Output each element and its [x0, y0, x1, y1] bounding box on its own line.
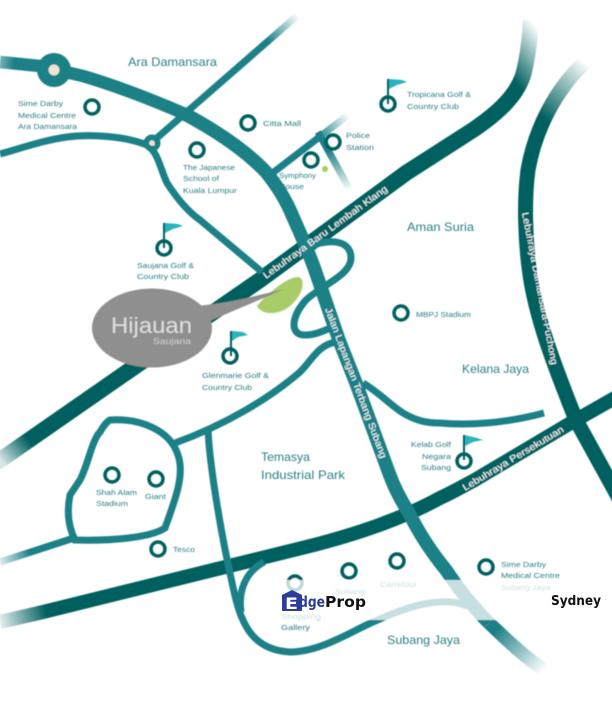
landmark: Tesco — [151, 542, 195, 556]
landmark: Sime Darby Medical Centre Subang Jaya: Medical Centre — [501, 571, 560, 580]
road name: Lebuhraya Baru Lembah Klang: Lebuhraya Baru Lembah Klang — [261, 184, 390, 281]
road: Glenmarie link and vertical road — [175, 342, 467, 652]
landmark: Saujana Golf and Country Club: Saujana Golf & — [137, 261, 194, 270]
logo: EdgeProp: dge — [299, 593, 325, 611]
landmark: Sime Darby Medical Centre Ara Damansara: Sime Darby — [18, 99, 63, 108]
landmark: Symphony House: House — [279, 182, 304, 191]
landmark: The Japanese School of Kuala Lumpur: School of — [183, 174, 220, 183]
area label: Subang Jaya: Subang Jaya — [387, 633, 460, 647]
road: Lebuhraya Damansara-Puchong — [526, 62, 612, 500]
landmark: The Japanese School of Kuala Lumpur — [183, 143, 238, 195]
area label: Ara Damansara: Ara Damansara — [128, 55, 217, 69]
area label: Kelana Jaya: Kelana Jaya — [462, 362, 529, 376]
road: Kelana Jaya link — [363, 383, 544, 424]
road: western link with small roundabout — [0, 136, 262, 272]
landmark: Subang — [335, 564, 365, 596]
roundabout — [37, 53, 71, 87]
road: interchange loop — [294, 242, 351, 335]
landmark: Kelab Golf Negara Subang: Negara — [422, 452, 452, 461]
landmark: Shopping Gallery: Shopping — [281, 612, 321, 621]
landmark: MBPJ Stadium: MBPJ Stadium — [416, 310, 471, 319]
landmark: Police Station: Police — [346, 131, 370, 140]
logo: EdgeProp: Prop — [325, 593, 366, 611]
label: Sydney: Sydney — [551, 594, 601, 609]
translucent watermark band — [280, 580, 612, 620]
landmark: Carrefour: Carrefour — [380, 580, 418, 589]
landmark: Kelab Golf Negara Subang: Kelab Golf — [411, 440, 452, 449]
landmark: Carrefour — [380, 554, 418, 589]
logo: EdgeProp — [282, 590, 366, 613]
landmark: Glenmarie Golf and Country Club — [202, 331, 269, 392]
landmark: Shopping Gallery: Gallery — [281, 623, 310, 632]
road name: Jalan Lapangan Terbang Subang: Jalan Lapangan Terbang Subang — [322, 306, 389, 460]
landmark: Glenmarie Golf and Country Club: Glenmarie Golf & — [202, 371, 269, 380]
site plot — [257, 277, 303, 313]
landmark: Shah Alam Stadium: Shah Alam — [96, 488, 137, 497]
landmark: Sime Darby Medical Centre Ara Damansara: Medical Centre — [18, 111, 76, 120]
road name: Lebuhraya Persekutuan: Lebuhraya Persekutuan — [461, 424, 566, 494]
landmark: MBPJ Stadium — [394, 306, 471, 320]
callout: Hijauan Saujana: Saujana — [153, 337, 192, 346]
landmark: Subang: Subang — [335, 587, 365, 596]
road name: Lebuhraya Damansara-Puchong: Lebuhraya Damansara-Puchong — [519, 211, 559, 366]
landmark: Sime Darby Medical Centre Subang Jaya: Sime Darby — [501, 560, 546, 569]
landmark: Giant: Giant — [145, 492, 167, 501]
small roundabout centre — [149, 140, 155, 146]
road: Lebuhraya Persekutuan — [0, 395, 612, 622]
road: Shah Alam loop — [68, 420, 180, 540]
road: Ara Damansara highway and Jalan Lapangan Terbang Subang — [0, 62, 544, 670]
callout: Hijauan Saujana — [92, 288, 284, 368]
landmark: Saujana Golf and Country Club — [137, 223, 194, 281]
landmark: Tesco: Tesco — [173, 545, 195, 554]
area label: Temasya Industrial Park — [261, 450, 346, 482]
landmark: Glenmarie Golf and Country Club: Country Club — [202, 383, 252, 392]
landmark: Shopping Gallery — [281, 576, 321, 632]
landmark: Saujana Golf and Country Club: Country Club — [137, 272, 189, 281]
area label: Aman Suria: Aman Suria — [407, 220, 474, 234]
landmark: Symphony House: Symphony — [279, 171, 316, 180]
landmark: Shah Alam Stadium — [96, 468, 137, 508]
landmark: Tropicana Golf and Country Club: Tropicana Golf & — [407, 90, 471, 99]
landmark: Tropicana Golf and Country Club — [381, 79, 471, 111]
landmark: Tropicana Golf and Country Club: Country Club — [407, 102, 459, 111]
area label: Temasya Industrial Park: Temasya — [261, 450, 310, 464]
landmark: Kelab Golf Negara Subang — [411, 435, 483, 472]
landmark: Citta Mall — [241, 116, 301, 130]
landmark: Symphony House — [279, 153, 328, 191]
callout: Hijauan Saujana: Hijauan — [111, 313, 192, 338]
landmark: Police Station — [326, 131, 374, 152]
landmark: Kelab Golf Negara Subang: Subang — [421, 463, 451, 472]
landmark: Sime Darby Medical Centre Ara Damansara — [18, 99, 99, 131]
landmark: Sime Darby Medical Centre Ara Damansara: Ara Damansara — [18, 122, 78, 131]
road: western approach — [0, 538, 74, 562]
landmark: Giant — [145, 472, 167, 501]
landmark: Police Station: Station — [346, 143, 374, 152]
logo: EdgeProp: E — [285, 594, 298, 613]
road: Lebuhraya Baru Lembah Klang — [0, 20, 531, 463]
road: Symphony House junction roads — [270, 115, 350, 190]
road: thin diagonal to Ara Damansara — [150, 15, 298, 144]
landmark: The Japanese School of Kuala Lumpur: The Japanese — [183, 163, 235, 172]
landmark: Citta Mall: Citta Mall — [263, 119, 301, 128]
landmark: Sime Darby Medical Centre Subang Jaya — [479, 560, 560, 592]
landmark: Sime Darby Medical Centre Subang Jaya: Subang Jaya — [501, 583, 551, 592]
area label: Temasya Industrial Park: Industrial Park — [261, 468, 346, 482]
landmark: Shah Alam Stadium: Stadium — [96, 499, 128, 508]
landmark: The Japanese School of Kuala Lumpur: Kuala Lumpur — [183, 186, 238, 195]
